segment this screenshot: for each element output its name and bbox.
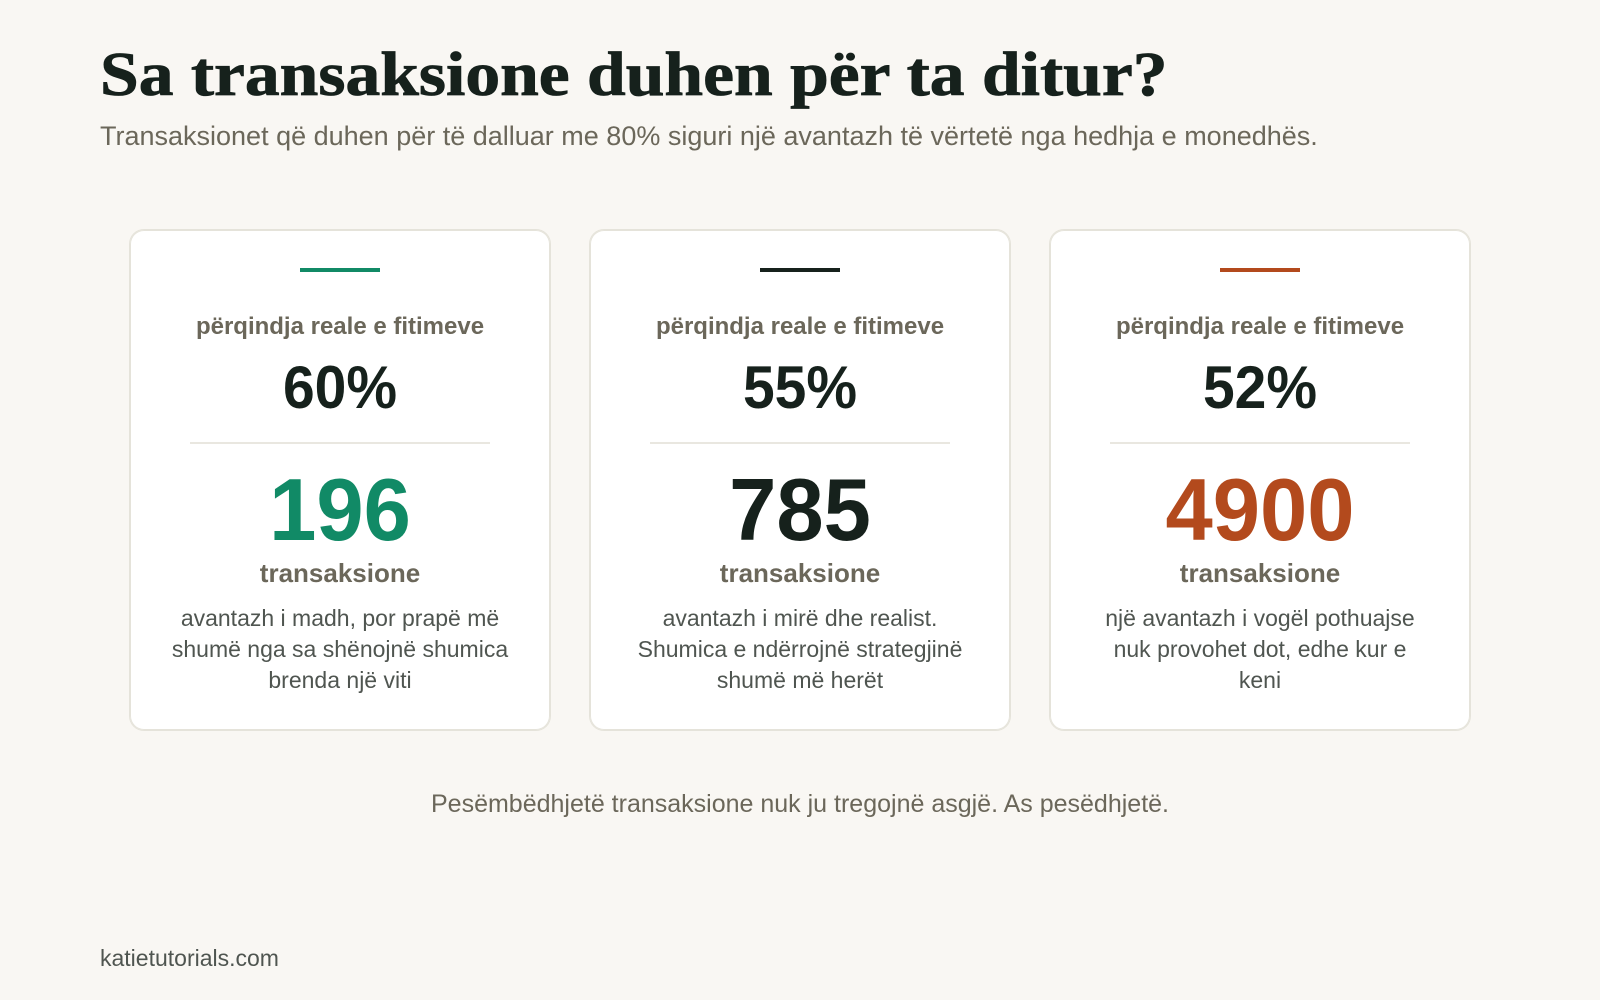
subtitle: Transaksionet që duhen për të dalluar me 80% siguri një avantazh të vërtetë nga hedhja e monedhës. (100, 121, 1318, 151)
label: win rate: përqindja reale e fitimeve (1116, 313, 1404, 340)
description: nuk provohet dot, edhe kur e (1114, 636, 1406, 662)
label: win rate: përqindja reale e fitimeve (196, 313, 484, 340)
unit label: transaksione (1180, 558, 1340, 588)
description: keni (1239, 666, 1281, 692)
description: avantazh i mirë dhe realist. (663, 604, 937, 630)
description: Shumica e ndërrojnë strategjinë (638, 636, 962, 662)
description: një avantazh i vogël pothuajse (1105, 604, 1415, 630)
transaction count: 4900 (1165, 460, 1355, 558)
win rate value: 60% (283, 354, 397, 421)
win rate value: 52% (1203, 354, 1317, 421)
transaction count: 196 (269, 460, 411, 558)
description (1105, 604, 1415, 692)
description (638, 604, 962, 692)
footer: source: katietutorials.com (100, 945, 279, 971)
description: brenda një viti (268, 666, 412, 692)
win rate value: 55% (743, 354, 857, 421)
unit label: transaksione (260, 558, 420, 588)
title: Sa transaksione duhen për ta ditur? (100, 41, 1168, 109)
unit label: transaksione (720, 558, 880, 588)
accent bar: green (300, 268, 380, 272)
label: win rate: përqindja reale e fitimeve (656, 313, 944, 340)
description (172, 604, 508, 693)
description: avantazh i madh, por prapë më (181, 604, 499, 630)
description: shumë më herët (717, 666, 883, 692)
description: shumë nga sa shënojnë shumica (172, 636, 508, 662)
accent bar: orange (1220, 268, 1300, 272)
transaction count: 785 (729, 460, 871, 558)
accent bar: dark (760, 268, 840, 272)
panel: 52% card (1050, 230, 1470, 730)
closing note: Pesëmbëdhjetë transaksione nuk ju tregojnë asgjë. As pesëdhjetë. (431, 790, 1169, 818)
panel: 55% card (590, 230, 1010, 730)
panel: 60% card (130, 230, 550, 730)
